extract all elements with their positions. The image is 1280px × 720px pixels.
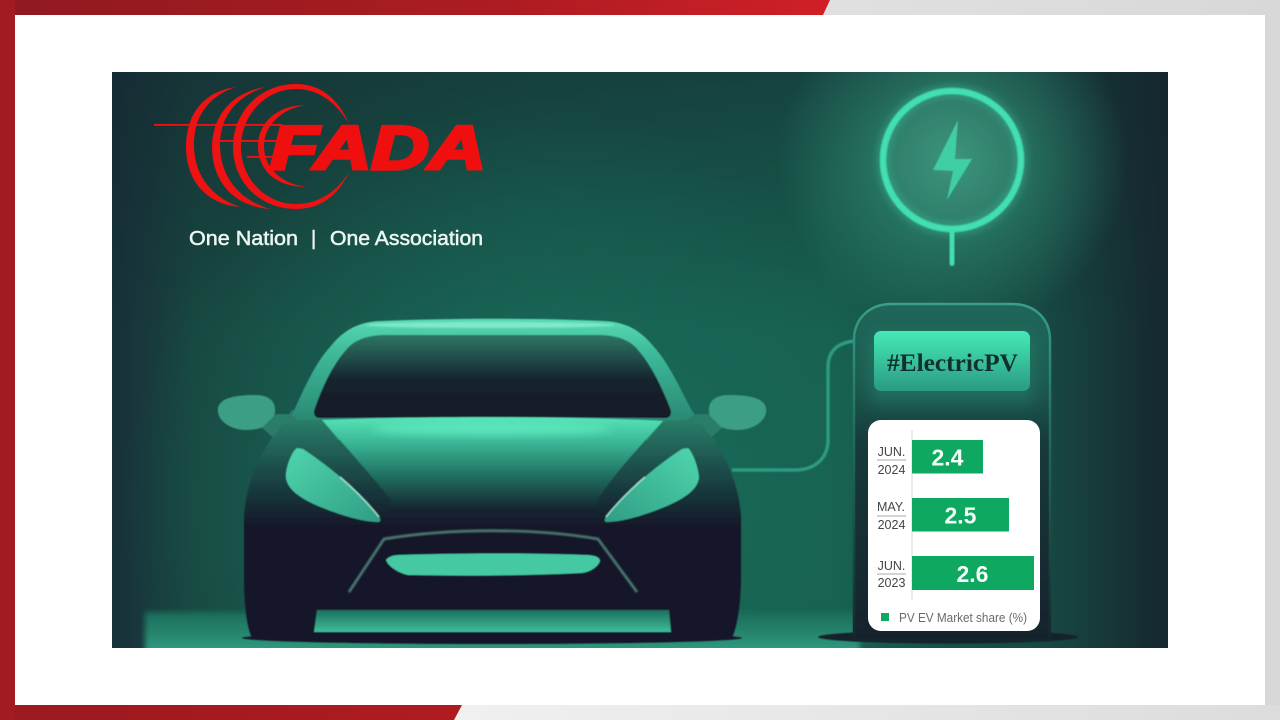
panel: EV charging illustration (112, 72, 1168, 648)
car (218, 319, 766, 644)
windshield (314, 335, 671, 418)
label: May 2024: 2024 (878, 518, 905, 532)
label: June 2024: 2024 (878, 463, 905, 477)
hashtag screen (874, 331, 1030, 391)
bar: May 2024: 2.5 (945, 502, 977, 528)
bar: June 2024: 2.4 (932, 444, 964, 470)
tagline (189, 228, 483, 250)
icon: charging cable (732, 341, 854, 470)
tagline: One Nation (189, 228, 298, 250)
label: June 2024 (877, 447, 906, 474)
car roof and pillars (292, 319, 694, 440)
panel: charging station (818, 304, 1078, 644)
label: May 2024 (877, 502, 906, 529)
background (112, 72, 1168, 648)
logo wordmark: FADA (270, 114, 486, 182)
charger base shadow (818, 630, 1078, 644)
car mirrors (218, 395, 766, 445)
logo rings (186, 84, 349, 209)
shoulder shading (300, 420, 716, 442)
label: May 2024: MAY. (877, 500, 905, 514)
bar: June 2023: 2.6 (957, 561, 988, 587)
chart legend: PV EV Market share (%) (899, 611, 1027, 625)
tagline: One Association (330, 228, 483, 250)
logo: FADA (154, 84, 486, 209)
car hood (322, 417, 663, 512)
bar: June 2024 (912, 440, 983, 474)
grille light (386, 554, 600, 576)
charger body (854, 304, 1050, 640)
left headlight (286, 448, 380, 522)
bar chart card (868, 420, 1040, 631)
icon: charging ring with lightning bolt (883, 91, 1021, 266)
screen glow (870, 335, 1034, 405)
hashtag screen: #ElectricPV (887, 350, 1018, 377)
grille outline (349, 531, 637, 592)
hood highlight (372, 422, 612, 436)
roof highlight (365, 322, 615, 328)
logo speed lines (154, 124, 282, 158)
label: June 2023: JUN. (878, 559, 905, 573)
bar: May 2024 (912, 498, 1009, 532)
tagline: | (311, 228, 316, 250)
label: June 2023: 2023 (878, 576, 905, 590)
car body (244, 410, 741, 638)
label: June 2024: JUN. (878, 445, 905, 459)
right headlight (605, 448, 699, 522)
car shadow (242, 636, 742, 645)
bar: June 2023 (912, 556, 1034, 590)
label: June 2023 (877, 561, 906, 587)
lower bumper (314, 610, 671, 632)
